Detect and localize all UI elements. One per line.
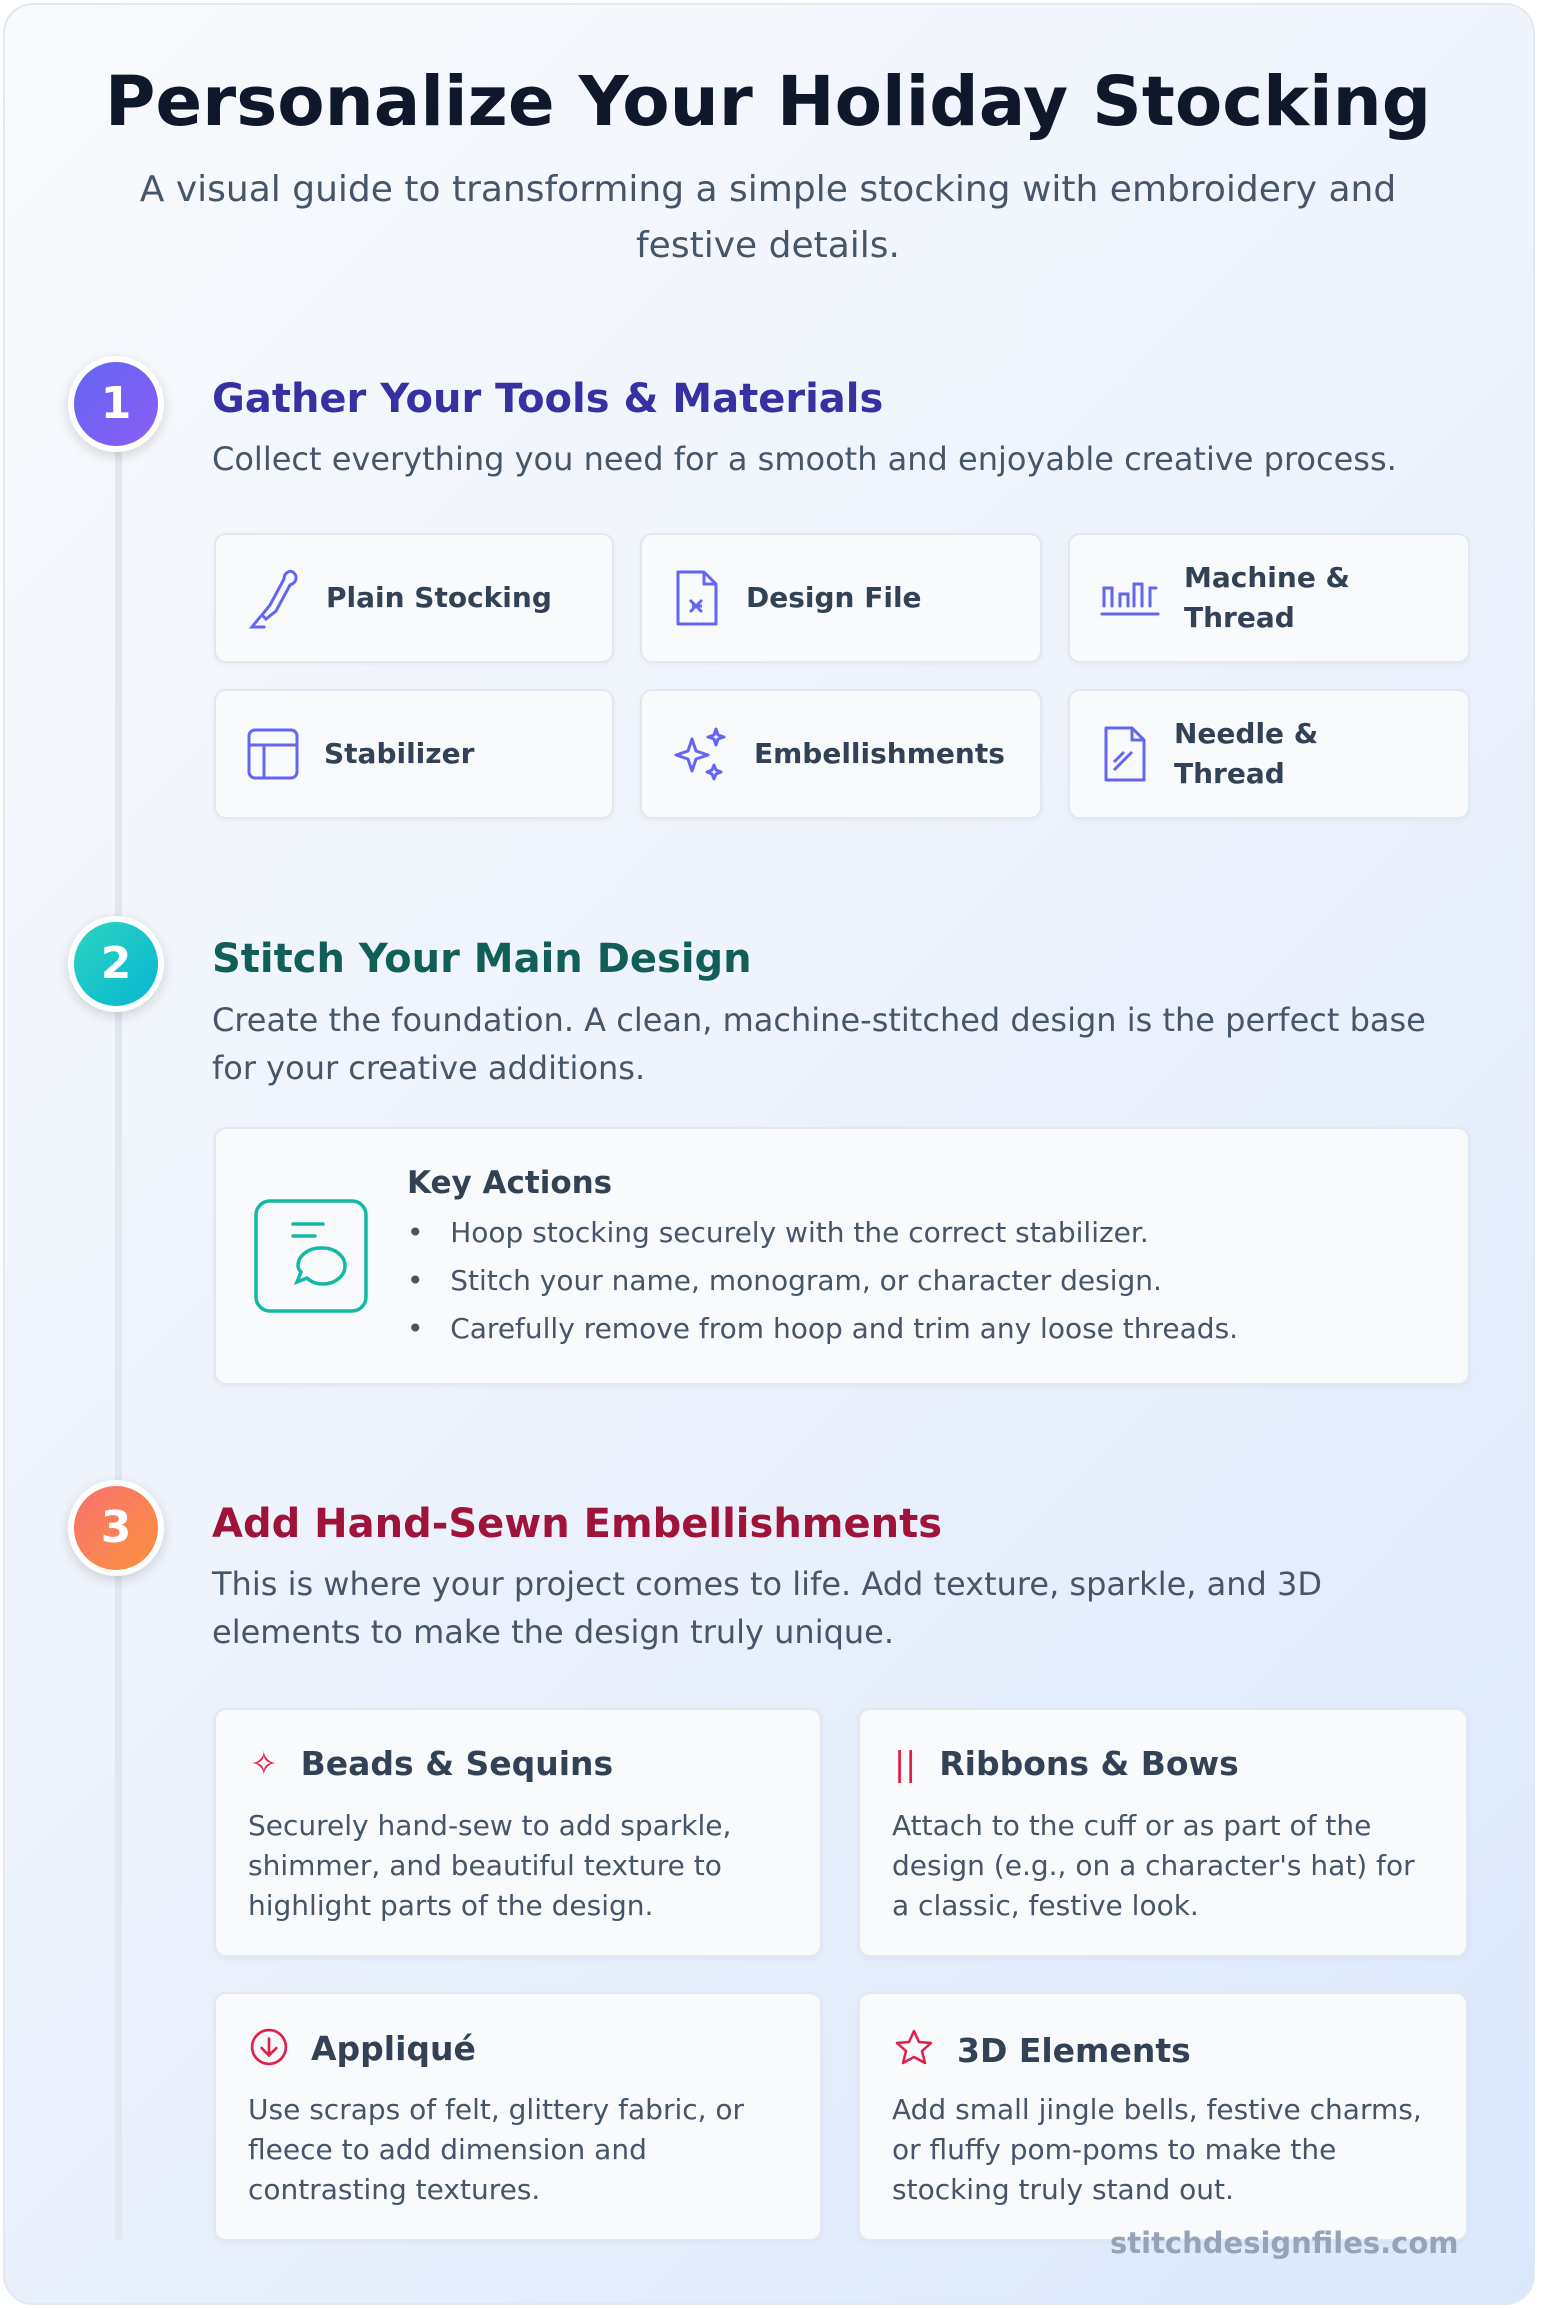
- card: applique: Use scraps of felt, glittery fabric, or fleece to add dimension and contrasting textures.: [248, 2093, 744, 2206]
- step 3 circle: 3: [101, 1502, 131, 1553]
- card: ribbons & bows: [858, 1708, 1468, 1957]
- tool: stabilizer: [214, 689, 614, 819]
- card: applique: Appliqué: [311, 2029, 476, 2068]
- card: beads & sequins: [214, 1708, 822, 1957]
- key actions text: • Stitch your name, monogram, or character design.: [407, 1264, 1162, 1297]
- step 2 description: Create the foundation. A clean, machine-stitched design is the perfect base for your creative additions.: [212, 1001, 1426, 1087]
- key actions text: [407, 1165, 1238, 1345]
- subtitle: A visual guide to transforming a simple stocking with embroidery and festive details.: [140, 169, 1396, 266]
- card: 3D elements: [858, 1992, 1468, 2241]
- watermark: stitchdesignfiles.com: [1110, 2226, 1459, 2260]
- tool: needle & thread: Thread: [1174, 757, 1285, 790]
- title: Personalize Your Holiday Stocking: [105, 62, 1431, 142]
- step 3 circle: [68, 1480, 164, 1576]
- tool: plain stocking: [214, 533, 614, 663]
- step 2 heading: Stitch Your Main Design: [212, 936, 752, 982]
- card: beads & sequins: Securely hand-sew to add sparkle, shimmer, and beautiful texture to highlight parts of the design.: [248, 1809, 731, 1922]
- key actions text: • Carefully remove from hoop and trim any loose threads.: [407, 1312, 1238, 1345]
- tool: needle & thread: Needle &: [1174, 717, 1318, 750]
- card: ribbons & bows: || Ribbons & Bows: [894, 1744, 1239, 1783]
- step 1 circle: 1: [101, 378, 131, 429]
- step 1 heading: Gather Your Tools & Materials: [212, 376, 883, 422]
- tool: plain stocking: Plain Stocking: [326, 581, 552, 614]
- step 2 circle: 2: [101, 938, 131, 989]
- tool: embellishments: Embellishments: [754, 737, 1005, 770]
- card: 3D elements: 3D Elements: [957, 2031, 1191, 2070]
- card: beads & sequins: ✧ Beads & Sequins: [250, 1744, 613, 1783]
- tool: machine & thread: Thread: [1184, 601, 1295, 634]
- card: 3D elements: Add small jingle bells, festive charms, or fluffy pom-poms to make the stocking truly stand out.: [892, 2093, 1422, 2206]
- panel: tools grid: [214, 533, 1470, 819]
- card: ribbons & bows: Attach to the cuff or as part of the design (e.g., on a character's hat) for a classic, festive look.: [892, 1809, 1415, 1922]
- tool: machine & thread: [1068, 533, 1470, 663]
- timeline line: [115, 404, 122, 2240]
- tool: machine & thread: Machine &: [1184, 561, 1350, 594]
- step 1 circle: [68, 356, 164, 452]
- tool: stabilizer: Stabilizer: [324, 737, 474, 770]
- icon: message bubble: [254, 1199, 368, 1313]
- tool: needle & thread: [1068, 689, 1470, 819]
- tool: design file: Design File: [746, 581, 922, 614]
- key actions text: • Hoop stocking securely with the correct stabilizer.: [407, 1216, 1149, 1249]
- card: applique: [214, 1992, 822, 2241]
- step 2 circle: [68, 916, 164, 1012]
- tool: embellishments: [640, 689, 1042, 819]
- tool: design file: [640, 533, 1042, 663]
- step 3 description: This is where your project comes to life. Add texture, sparkle, and 3D elements to make the design truly unique.: [212, 1565, 1322, 1651]
- step 3 heading: Add Hand-Sewn Embellishments: [212, 1501, 942, 1547]
- key actions text: Key Actions: [407, 1165, 612, 1201]
- panel: key actions: [214, 1127, 1470, 1385]
- step 1 description: Collect everything you need for a smooth and enjoyable creative process.: [212, 440, 1397, 478]
